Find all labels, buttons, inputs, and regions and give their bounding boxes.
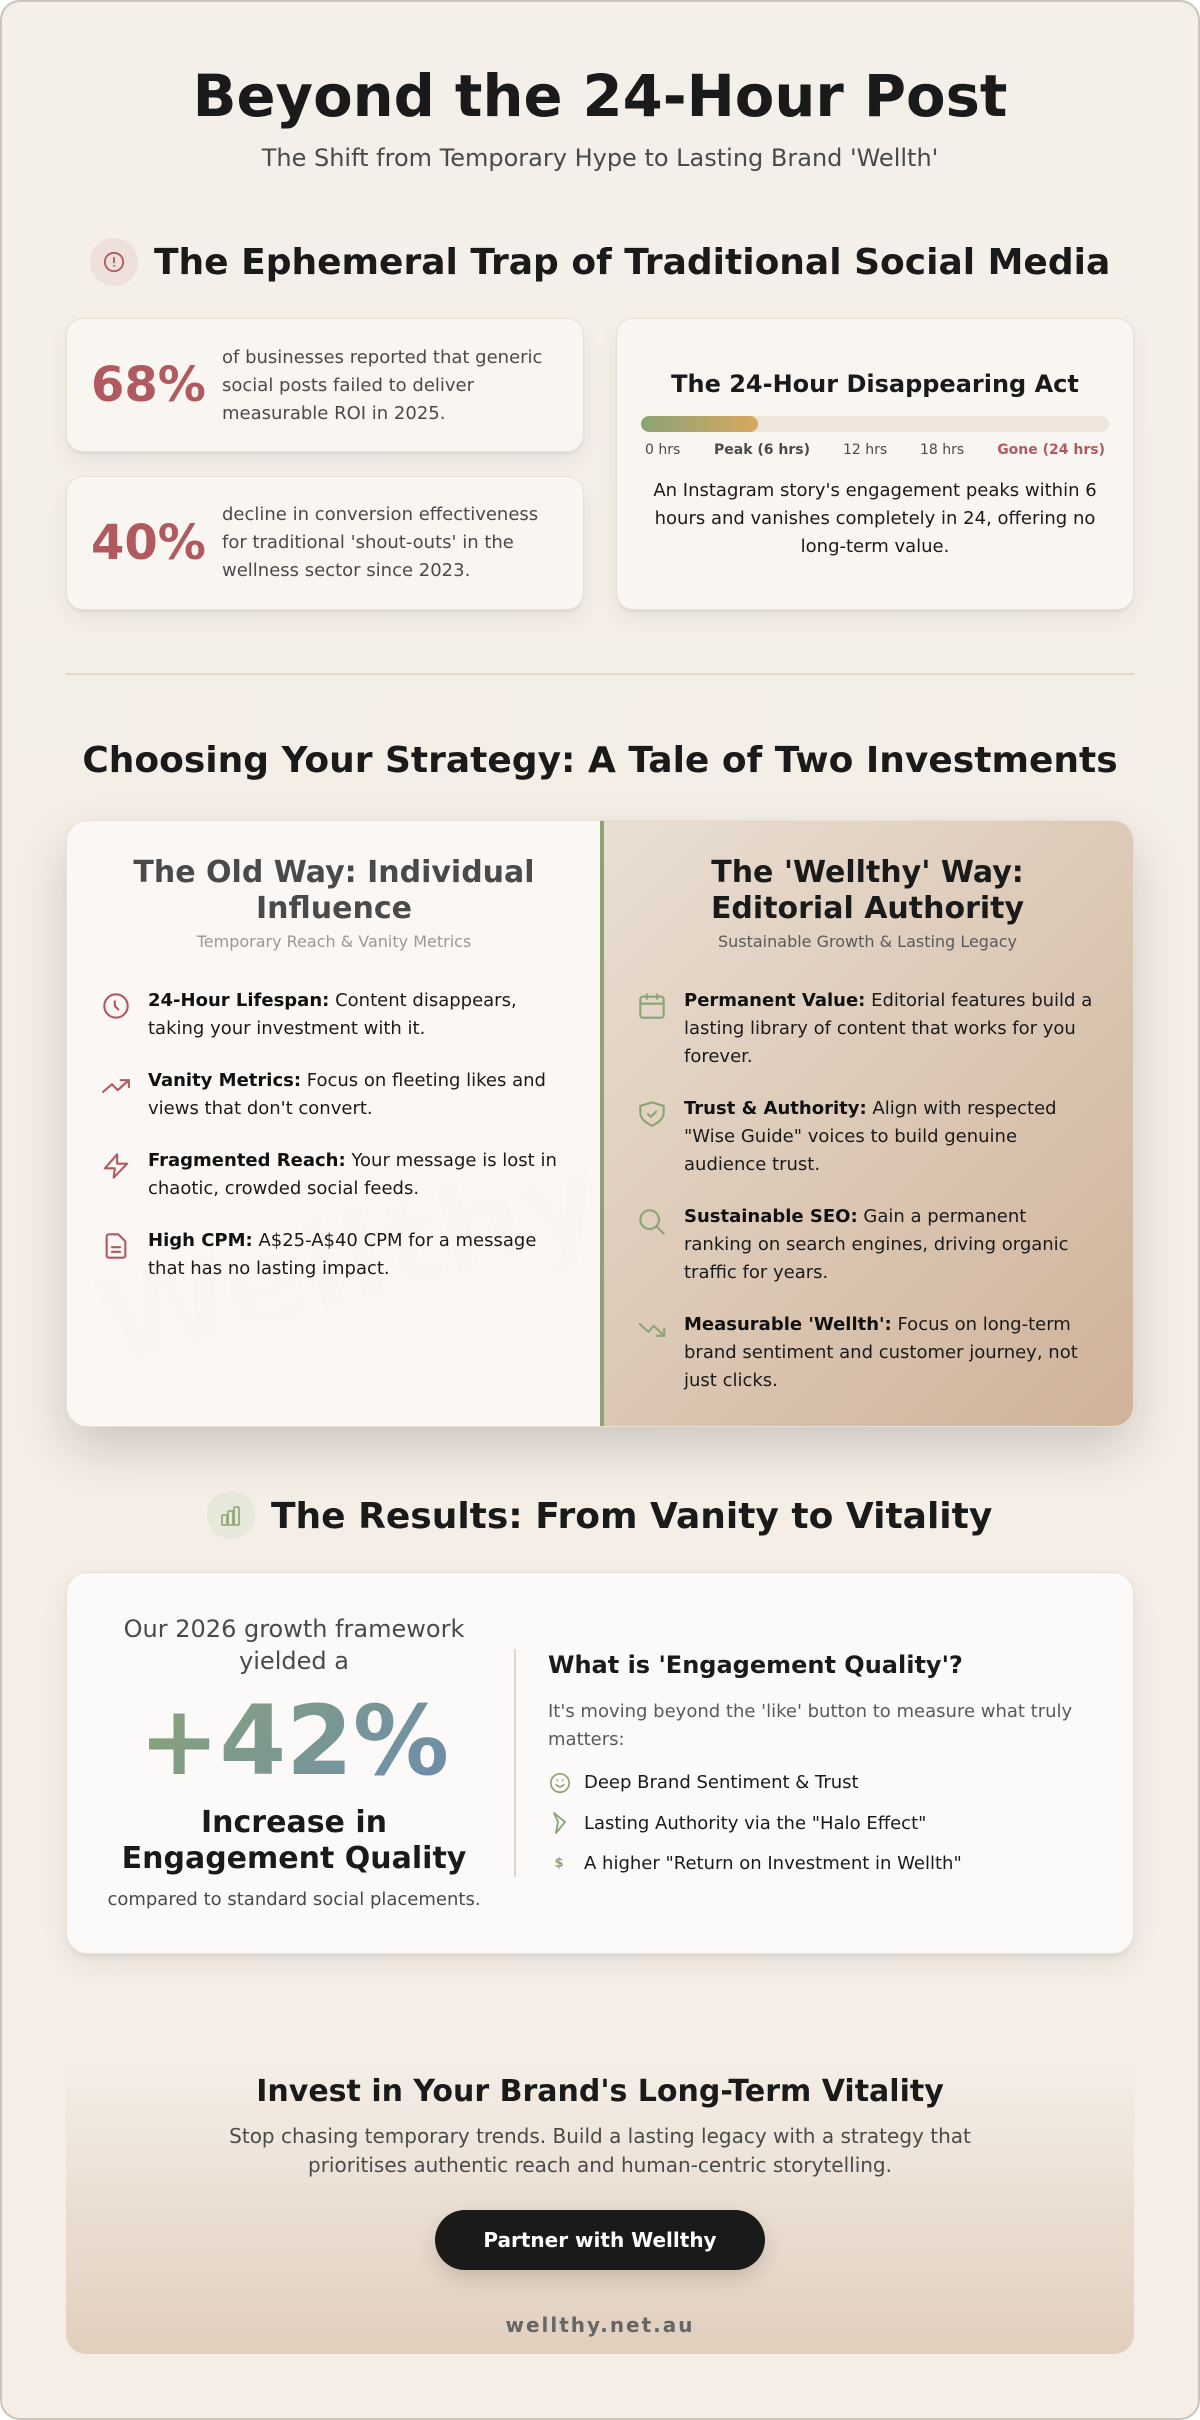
item text: just clicks.: [684, 1370, 778, 1391]
item: sustainable seo: [639, 1206, 1069, 1283]
heading text: The Ephemeral Trap of Traditional Social Media: [154, 242, 1110, 282]
icon: dollar: $: [554, 1856, 564, 1871]
item text: [684, 1098, 1057, 1175]
panel: old way: [67, 821, 600, 1426]
item text: Measurable 'Wellth': Focus on long-term: [684, 1314, 1071, 1335]
item text: [148, 1070, 546, 1119]
timeline caption: [653, 480, 1097, 557]
timeline labels: Gone (24 hrs): [997, 442, 1105, 458]
icon: trending down: [638, 1323, 666, 1337]
item text: Lasting Authority via the "Halo Effect": [584, 1813, 926, 1834]
stat number: 40%: [91, 515, 206, 571]
list item: return: [549, 1850, 1049, 1878]
panel: comparison: [67, 821, 1133, 1426]
item text: views that don't convert.: [148, 1098, 373, 1119]
item text: Vanity Metrics: Focus on fleeting likes and: [148, 1070, 546, 1091]
heading text: The Results: From Vanity to Vitality: [271, 1496, 992, 1536]
center divider: [600, 821, 604, 1426]
item text: lasting library of content that works for you: [684, 1018, 1076, 1039]
explanation text: [548, 1701, 1072, 1750]
list item: authority: [553, 1812, 926, 1834]
intro text: [124, 1615, 464, 1675]
timeline caption: An Instagram story's engagement peaks within 6: [653, 480, 1097, 501]
stat description: social posts failed to deliver: [222, 375, 474, 396]
item text: [684, 990, 1092, 1067]
stat description: [222, 504, 538, 581]
item text: "Wise Guide" voices to build genuine: [684, 1126, 1017, 1147]
item text: brand sentiment and customer journey, not: [684, 1342, 1078, 1363]
item text: traffic for years.: [684, 1262, 828, 1283]
item text: that has no lasting impact.: [148, 1258, 390, 1279]
explanation text: matters:: [548, 1729, 625, 1750]
item text: High CPM: A$25-A$40 CPM for a message: [148, 1230, 536, 1251]
list item: sentiment: [550, 1772, 859, 1793]
item: vanity metrics: [102, 1070, 546, 1119]
stat label: [122, 1805, 466, 1876]
item: high cpm: [106, 1230, 536, 1279]
item: fragmented reach: [104, 1150, 557, 1199]
stat description: wellness sector since 2023.: [222, 560, 470, 581]
cta text: Stop chasing temporary trends. Build a lasting legacy with a strategy that: [229, 2124, 971, 2148]
stat label: Engagement Quality: [122, 1841, 466, 1876]
stat description: of businesses reported that generic: [222, 347, 542, 368]
column heading: Influence: [256, 891, 412, 926]
column heading: The 'Wellthy' Way:: [711, 855, 1024, 890]
subtitle: The Shift from Temporary Hype to Lasting Brand 'Wellth': [262, 144, 938, 172]
item: permanent value: [639, 990, 1092, 1067]
item text: Deep Brand Sentiment & Trust: [584, 1772, 859, 1793]
stat card: 68%: [67, 319, 583, 451]
timeline labels: 0 hrs: [645, 442, 680, 458]
item text: Trust & Authority: Align with respected: [684, 1098, 1057, 1119]
column heading: Editorial Authority: [711, 891, 1024, 926]
stat label: Increase in: [201, 1805, 387, 1840]
item: trust and authority: [639, 1098, 1057, 1175]
panel: wellthy way: [604, 821, 1133, 1426]
item text: [148, 1150, 557, 1199]
timeline labels: 12 hrs: [843, 442, 887, 458]
item: measurable wellth: [638, 1314, 1078, 1391]
item text: Sustainable SEO: Gain a permanent: [684, 1206, 1026, 1227]
timeline labels: [645, 442, 1105, 458]
watermark: Wellthy: [84, 1127, 600, 1394]
stat description: decline in conversion effectiveness: [222, 504, 538, 525]
heading: engagement quality: What is 'Engagement Quality'?: [548, 1651, 963, 1679]
cta text: prioritises authentic reach and human-centric storytelling.: [308, 2153, 892, 2177]
explanation text: It's moving beyond the 'like' button to measure what truly: [548, 1701, 1072, 1722]
item text: 24-Hour Lifespan: Content disappears,: [148, 990, 517, 1011]
timeline labels: Peak (6 hrs): [714, 442, 810, 458]
column subheading: Temporary Reach & Vanity Metrics: [197, 932, 471, 950]
timeline caption: long-term value.: [801, 536, 949, 557]
stat description: [222, 347, 542, 424]
item text: [684, 1206, 1069, 1283]
icon: document: [106, 1233, 126, 1259]
title: Beyond the 24-Hour Post: [193, 63, 1007, 130]
stat footnote: compared to standard social placements.: [107, 1889, 481, 1910]
icon: clock: [103, 993, 129, 1019]
item text: ranking on search engines, driving organic: [684, 1234, 1069, 1255]
item text: Permanent Value: Editorial features build a: [684, 990, 1092, 1011]
icon: search: [639, 1209, 665, 1235]
item text: [148, 1230, 536, 1279]
icon: shield check: [639, 1101, 665, 1127]
item text: [148, 990, 517, 1039]
column heading: [711, 855, 1024, 926]
stat card: 40%: [67, 477, 583, 609]
panel: 24-hour disappearing act: [617, 319, 1133, 609]
icon: calendar: [639, 993, 665, 1019]
icon: lightning bolt: [104, 1153, 128, 1179]
item text: A higher "Return on Investment in Wellth": [584, 1853, 962, 1874]
item text: chaotic, crowded social feeds.: [148, 1178, 419, 1199]
item text: Fragmented Reach: Your message is lost in: [148, 1150, 557, 1171]
item text: [684, 1314, 1078, 1391]
column heading: The Old Way: Individual: [133, 855, 535, 890]
cta button: Partner with Wellthy: [483, 2228, 717, 2252]
timeline bar: [641, 416, 1109, 432]
icon: smile: [550, 1773, 570, 1793]
timeline caption: hours and vanishes completely in 24, offering no: [655, 508, 1095, 529]
section heading: results: [207, 1491, 992, 1539]
website: wellthy.net.au: [505, 2313, 695, 2337]
intro text: yielded a: [239, 1647, 349, 1675]
item text: forever.: [684, 1046, 753, 1067]
card heading: The 24-Hour Disappearing Act: [671, 370, 1079, 398]
section heading: strategy: Choosing Your Strategy: A Tale of Two Investments: [82, 740, 1118, 780]
icon: pointer: [553, 1812, 566, 1834]
item text: taking your investment with it.: [148, 1018, 425, 1039]
column heading: [133, 855, 535, 926]
cta button: [435, 2210, 765, 2270]
timeline labels: 18 hrs: [920, 442, 964, 458]
stat description: for traditional 'shout-outs' in the: [222, 532, 514, 553]
icon: bar chart: [207, 1491, 255, 1539]
cta text: [66, 2122, 1134, 2180]
cta heading: Invest in Your Brand's Long-Term Vitality: [256, 2074, 944, 2109]
panel: results: [67, 1573, 1133, 1953]
stat number: 68%: [91, 357, 206, 413]
big stat: +42%: [139, 1685, 449, 1797]
icon: trending up: [102, 1079, 130, 1093]
section heading: ephemeral trap: [90, 238, 1110, 286]
icon: alert circle: [90, 238, 138, 286]
stat description: measurable ROI in 2025.: [222, 403, 445, 424]
vertical divider: [514, 1649, 516, 1877]
intro text: Our 2026 growth framework: [124, 1615, 464, 1643]
column subheading: Sustainable Growth & Lasting Legacy: [718, 932, 1017, 950]
item: 24-hour lifespan: [103, 990, 517, 1039]
timeline fill: [641, 416, 758, 432]
panel: call to action: [66, 2053, 1134, 2354]
item text: audience trust.: [684, 1154, 820, 1175]
divider line: [66, 673, 1134, 675]
